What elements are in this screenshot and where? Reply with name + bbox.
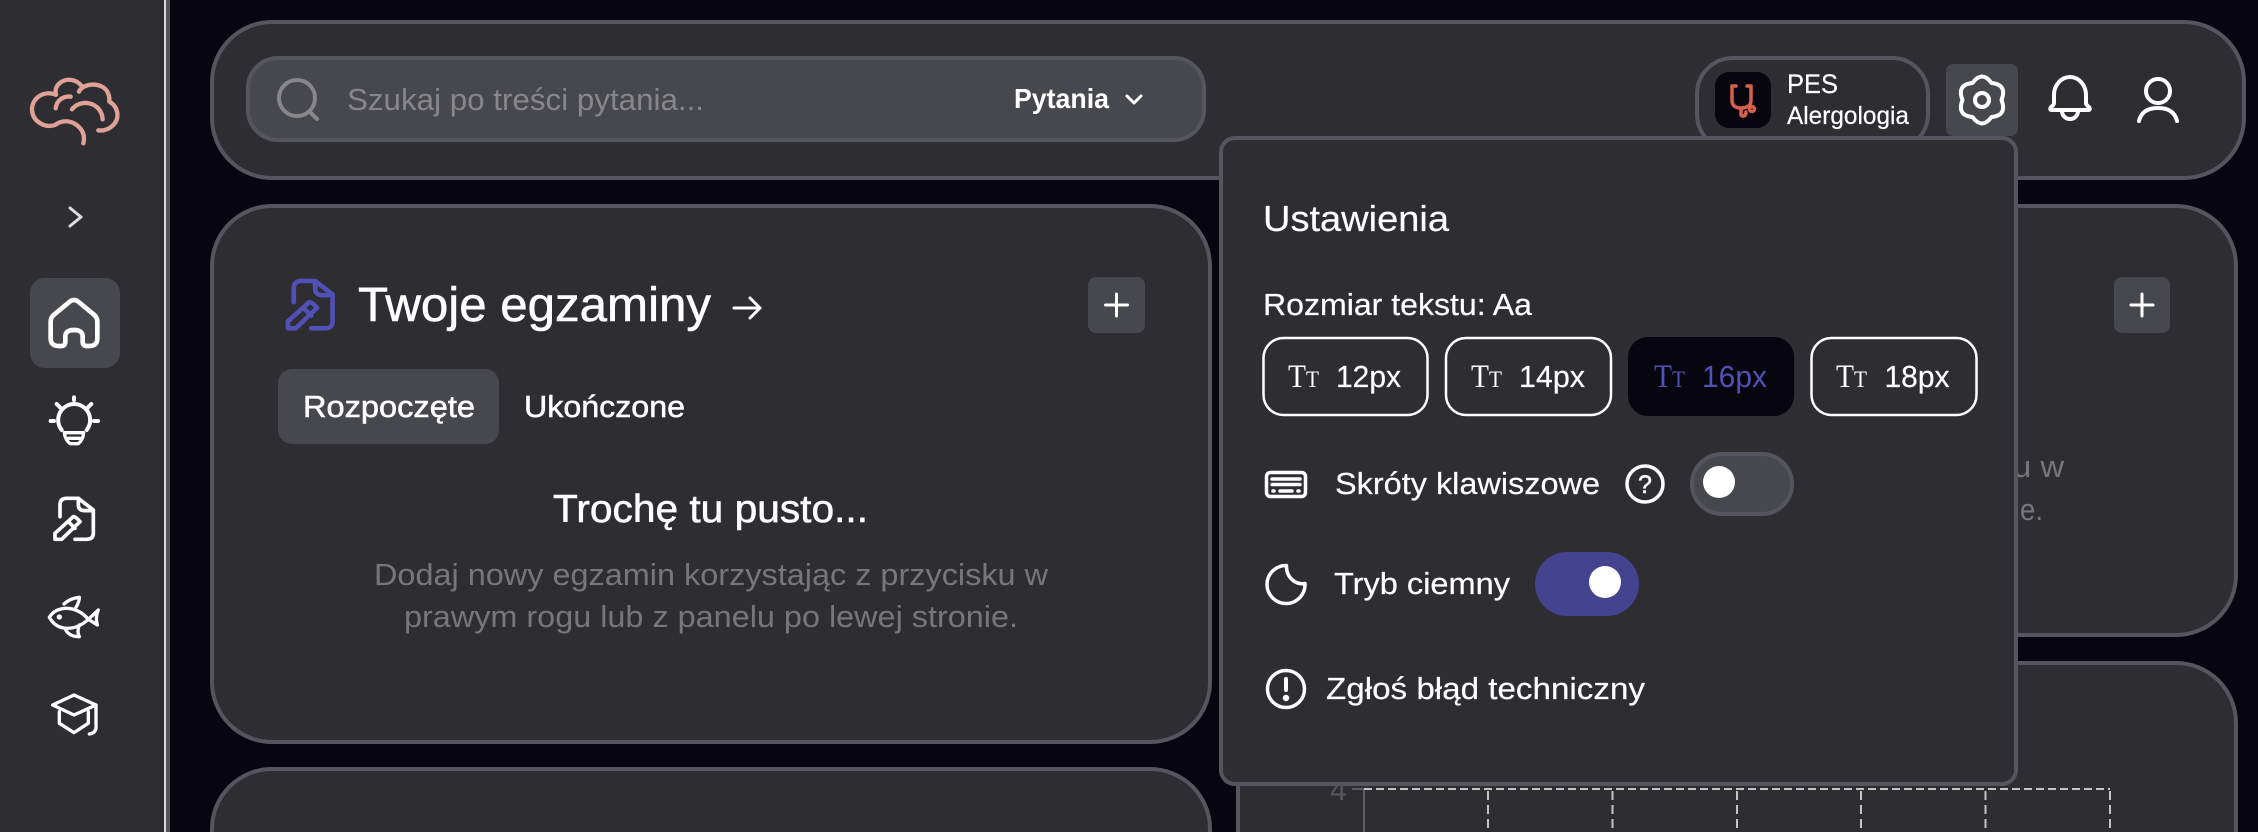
size option 14px: 14px: [1519, 359, 1585, 394]
top bar: [212, 22, 2244, 178]
keyboard shortcuts label: Skróty klawiszowe: [1335, 466, 1600, 501]
settings button: [1946, 64, 2018, 136]
panel: chart: [1238, 663, 2236, 832]
panel: lower left: [212, 769, 1210, 832]
icon: bell: [2050, 77, 2090, 119]
add button: [1088, 277, 1145, 333]
toggle on: [1535, 552, 1639, 616]
size option 18px: 18px: [1884, 359, 1950, 394]
size option 16px selected: 16px: [1702, 359, 1767, 394]
popover title: Ustawienia: [1263, 198, 1450, 239]
sidebar: [0, 0, 170, 832]
panel: upper right: [1238, 206, 2236, 635]
panel: exams: [212, 206, 1210, 742]
empty state description: [374, 557, 1049, 634]
icon: graduation cap: [53, 695, 96, 734]
size option 18px: [1812, 338, 1976, 415]
size option 18px: T: [1836, 359, 1854, 395]
search scope dropdown: Pytania: [1014, 83, 1109, 114]
icon: moon: [1267, 565, 1305, 603]
empty state description: prawym rogu lub z panelu po lewej stronie.: [404, 599, 1018, 634]
partly hidden description: e.: [2020, 492, 2043, 527]
icon: alert: [1268, 670, 1304, 708]
icon: fish: [49, 597, 98, 637]
icon: exam document: [55, 498, 93, 539]
dark mode label: Tryb ciemny: [1334, 566, 1511, 601]
exam selector pill: [1697, 58, 1928, 150]
size option 12px: [1264, 338, 1428, 415]
heading: Twoje egzaminy: [358, 279, 711, 332]
home button: [30, 278, 120, 368]
report error label: Zgłoś błąd techniczny: [1326, 671, 1646, 706]
tab: completed: Ukończone: [524, 389, 685, 424]
size option 16px selected: T: [1672, 367, 1685, 392]
icon: blue exam document: [288, 281, 333, 328]
size option 12px: T: [1306, 367, 1319, 392]
icon: user: [2139, 79, 2177, 121]
settings popover: [1221, 138, 2016, 784]
size option 14px: T: [1471, 359, 1489, 395]
partly hidden description: [2013, 449, 2065, 527]
exam selector pill: Alergologia: [1787, 102, 1909, 130]
size option 14px: T: [1489, 367, 1502, 392]
selector labels: PES: [1787, 69, 1838, 99]
icon: light bulb: [51, 397, 98, 444]
tab: started: [278, 369, 499, 444]
icon: help: ?: [1638, 471, 1652, 499]
y-axis label: 4: [1330, 774, 1347, 807]
partly hidden description: u w: [2013, 449, 2065, 484]
arrow: [734, 298, 760, 318]
toggle off: [1692, 454, 1792, 514]
chart grid: [1364, 789, 2110, 832]
icon: help: [1627, 466, 1663, 502]
chart axis: [1352, 789, 1364, 832]
size option 16px selected: [1628, 337, 1794, 416]
icon: search: [279, 80, 317, 119]
tab: started: Rozpoczęte: [303, 389, 475, 424]
icon: stethoscope: [1715, 72, 1771, 128]
search placeholder: Szukaj po treści pytania...: [347, 82, 704, 117]
size option 12px: 12px: [1336, 359, 1401, 394]
size option 14px: [1446, 338, 1611, 415]
icon: brain logo: [32, 80, 117, 143]
icon: expand chevron: [70, 208, 81, 226]
icon: keyboard: [1266, 472, 1306, 496]
text size label: Rozmiar tekstu: Aa: [1263, 287, 1533, 322]
size option 16px selected: T: [1654, 359, 1672, 395]
empty state description: Dodaj nowy egzamin korzystając z przycisku w: [374, 557, 1049, 592]
add button: [2114, 277, 2170, 333]
empty state title: Trochę tu pusto...: [553, 488, 868, 531]
size option 18px: T: [1854, 367, 1867, 392]
size option 12px: T: [1288, 359, 1306, 395]
search field: [248, 58, 1204, 140]
